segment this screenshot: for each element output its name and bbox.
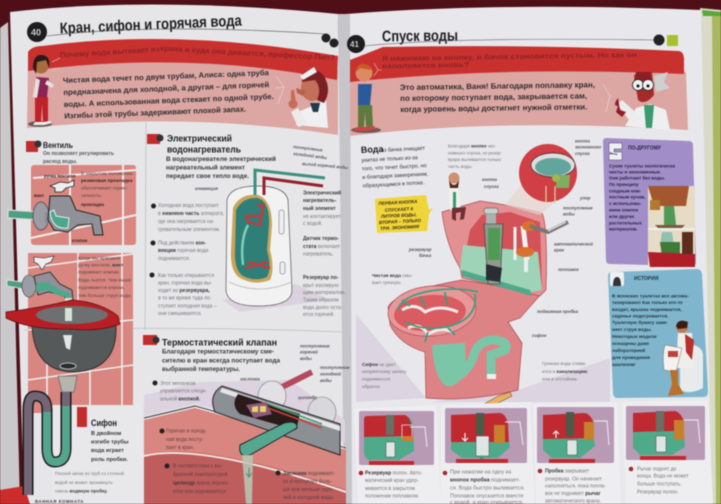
another way text: материалов. bbox=[609, 226, 638, 232]
heater labels: Резервуар по- bbox=[303, 275, 339, 281]
valve intro: расход воды. bbox=[43, 159, 78, 165]
heater steps: поднимается. bbox=[158, 256, 190, 262]
card text 3: вок не поднимет рычаг bbox=[545, 491, 601, 497]
thermostat steps: цилиндр крана опуска- bbox=[173, 480, 229, 486]
thermostat illustration bbox=[213, 372, 340, 504]
section: thermostatic valve bbox=[143, 335, 350, 504]
left page stack bbox=[0, 22, 20, 504]
toilet labels: Сифон не дает bbox=[362, 361, 397, 367]
toilet labels: неприятному запаху bbox=[362, 369, 407, 374]
another way text: сходным ком- bbox=[609, 188, 641, 194]
thermostat steps: Горячая и холод- bbox=[166, 428, 207, 434]
closed valve labels: клапан bbox=[72, 238, 88, 243]
heater labels: крыт изолирую- bbox=[303, 283, 340, 289]
siphon text: изгибе трубы bbox=[91, 438, 129, 446]
siphon text bbox=[55, 430, 129, 494]
speech marks right bbox=[374, 63, 612, 112]
toilet labels: кнопка bbox=[575, 138, 591, 144]
purple box bbox=[603, 138, 696, 266]
tank bbox=[442, 201, 546, 296]
header dots bbox=[322, 34, 338, 48]
closed valve labels: винт bbox=[34, 193, 45, 198]
blue box bbox=[608, 269, 708, 398]
history text: лабораторией bbox=[612, 347, 645, 353]
closed valve labels: обеспечивает герме- bbox=[81, 186, 128, 192]
card text 2: При нажатии на одну из bbox=[450, 470, 512, 476]
heater labels bbox=[195, 144, 349, 318]
card text 4: больше поступать. bbox=[637, 482, 682, 488]
open tap text: ручку вентиля, винт bbox=[78, 264, 124, 268]
toilet labels: резервуар bbox=[408, 247, 432, 252]
heater steps: ходит из резервуара, bbox=[158, 288, 210, 294]
toilet labels: ется в канализацию bbox=[542, 369, 587, 374]
heater labels: не контактирует bbox=[303, 214, 341, 220]
answer text right bbox=[400, 80, 595, 114]
yellow note: ПЕРВАЯ КНОПКА bbox=[378, 199, 417, 206]
step card 4 bbox=[622, 400, 713, 504]
heater labels: Датчик термо- bbox=[303, 236, 339, 242]
open tap text: поднимается клапан, bbox=[78, 286, 125, 291]
heater steps: они смешиваются. bbox=[158, 311, 202, 317]
left page header bbox=[27, 13, 338, 48]
thermostat intro: Благодаря термостатическому сме- bbox=[162, 350, 274, 356]
man on Japanese toilet bbox=[663, 321, 703, 396]
title right: Спуск воды bbox=[382, 27, 458, 45]
yellow note: СПУСКАЕТ 6 bbox=[385, 206, 414, 213]
toilet labels: упор bbox=[579, 196, 591, 200]
step card 1 bbox=[354, 405, 441, 504]
toilet labels: подниматься bbox=[362, 376, 391, 382]
heater labels: выход горячей воды bbox=[302, 161, 349, 170]
toilet intro text: того, что течет быстро, но bbox=[362, 163, 427, 172]
siphon text: В двойном bbox=[91, 430, 121, 437]
heater labels: конвекция bbox=[195, 186, 218, 191]
closed valve tiled panel bbox=[31, 165, 136, 245]
toilet labels: поплавок bbox=[558, 267, 579, 272]
toilet labels: экономного bbox=[575, 144, 601, 150]
right page header bbox=[347, 27, 678, 53]
right page bbox=[346, 7, 712, 504]
heater steps: Под действием кон- bbox=[158, 240, 206, 246]
red corner bbox=[0, 486, 30, 504]
toilet labels: поступление bbox=[563, 206, 593, 210]
closed tap bbox=[8, 180, 103, 235]
thermostat steps: ется или поднимается. bbox=[173, 489, 227, 495]
valve intro: Он позволяет регулировать bbox=[43, 151, 114, 157]
answer text right: когда уровень воды достигнет нужной отметки. bbox=[400, 102, 587, 114]
heater steps bbox=[150, 203, 224, 317]
character: professor Pip left bbox=[288, 67, 328, 128]
history text: Туалетную бумагу заме- bbox=[612, 319, 669, 325]
heater steps: Холодная вода поступает bbox=[158, 203, 220, 209]
toilet labels: вает грязную. bbox=[372, 280, 402, 285]
thermostat wall and floor bbox=[144, 380, 346, 504]
panel: another way bbox=[603, 138, 696, 267]
question text right: Я нажимаю на кнопку, и бачок становится пустым. Но как он bbox=[382, 50, 637, 63]
heater labels: холодной воды bbox=[292, 151, 327, 160]
open tap text: поднимает клапан. bbox=[78, 270, 120, 276]
icon: pipe bbox=[609, 143, 622, 160]
thermostat steps: альной кнопкой. bbox=[160, 396, 201, 402]
answer text: Чистая вода течет по двум трубам, Алиса: одна труба bbox=[63, 68, 270, 85]
heater heading: Электрический bbox=[167, 134, 232, 144]
heater intro: нагревательный элемент bbox=[166, 164, 245, 172]
heater labels: вода долго оста- bbox=[303, 305, 343, 311]
yellow note: ЛИТРОВ ВОДЫ, bbox=[380, 212, 417, 219]
another way text: постным кучам, bbox=[609, 194, 645, 200]
toilet intro text bbox=[361, 142, 429, 189]
card text 2: Поплавок опускается вместе bbox=[450, 494, 524, 500]
footer text: ВАННАЯ КОМНАТА bbox=[35, 499, 84, 504]
heater heading bbox=[167, 134, 241, 156]
thermostat steps: ся и поступает боль- bbox=[283, 479, 332, 485]
open tap text: Вода льется. Чем выше bbox=[78, 278, 132, 284]
history text: Некоторые модели bbox=[612, 334, 657, 339]
history heading: ИСТОРИЯ bbox=[634, 276, 659, 282]
toilet labels: сифон bbox=[532, 333, 547, 338]
heater steps: ступает холодная вода – bbox=[158, 304, 217, 310]
heater steps: где она нагревается на- bbox=[158, 219, 215, 225]
closed valve labels: тичность. bbox=[81, 194, 102, 199]
heater steps: гревательным элементом. bbox=[158, 227, 220, 233]
thermostat steps: бранной температурой bbox=[173, 471, 228, 478]
toilet labels: автоматический bbox=[554, 242, 593, 246]
card text 4: конца. Вода не может bbox=[637, 474, 689, 480]
thermostat steps: Этот механизм bbox=[160, 381, 196, 387]
toilet labels: кнопка bbox=[482, 177, 498, 182]
heater intro: передает свое тепло воде. bbox=[166, 174, 249, 180]
thermostat labels bbox=[240, 344, 350, 400]
toilet labels: подвижная пробка bbox=[537, 309, 579, 314]
thermostat tab bbox=[143, 335, 160, 345]
another way text: растительных bbox=[609, 220, 642, 226]
card text 1: положении поплавком. bbox=[365, 494, 419, 500]
another way heading: ПО-ДРУГОМУ bbox=[628, 146, 662, 152]
thermostat intro: сителю в кран всегда поступает вода bbox=[162, 358, 281, 364]
thermostat labels: холодной bbox=[319, 372, 341, 376]
siphon text: роль пробки. bbox=[91, 456, 128, 463]
toilet labels: Грязная вода слива- bbox=[542, 361, 587, 366]
economy button text bbox=[448, 144, 502, 169]
heater labels: поступление bbox=[293, 144, 323, 153]
header icons right bbox=[654, 34, 678, 46]
water stream bbox=[65, 298, 72, 320]
water jets bbox=[398, 289, 478, 342]
toilet labels: спуска bbox=[484, 184, 499, 189]
another way text: Сухие туалеты экологически bbox=[609, 164, 675, 168]
speech marks bbox=[52, 58, 284, 104]
tank diagram 4 bbox=[626, 406, 705, 460]
toilet intro text: образующимся в потоке. bbox=[363, 180, 425, 189]
heater labels: ется горячей. bbox=[303, 311, 335, 318]
tiled wall bbox=[28, 253, 133, 413]
valve intro bbox=[43, 151, 114, 165]
question text bbox=[60, 44, 336, 62]
card text 1: Резервуар полон. Авто- bbox=[365, 470, 423, 476]
thermostat steps: управляется специ- bbox=[160, 388, 207, 394]
thermostat intro: выбранной температуры. bbox=[162, 366, 240, 373]
header rule right bbox=[364, 39, 655, 46]
red question band bbox=[28, 39, 338, 80]
toilet labels bbox=[362, 138, 601, 389]
siphon text: вода играет bbox=[91, 448, 124, 454]
history text: оснащены даже bbox=[612, 341, 649, 346]
siphon text: водой не может проникнуть bbox=[55, 479, 113, 485]
yellow note bbox=[375, 195, 433, 233]
pink answer panel right bbox=[350, 70, 688, 136]
thermostat labels: воды bbox=[320, 378, 332, 383]
open tap text: тем больше струя воды. bbox=[78, 293, 132, 299]
step card 2 bbox=[441, 402, 535, 504]
another way text: с использова- bbox=[609, 201, 642, 206]
toilet intro text: и благодаря завихрениям, bbox=[362, 171, 429, 181]
answer text bbox=[63, 68, 274, 120]
left page bbox=[10, 4, 346, 504]
thermostat labels: поступление bbox=[300, 344, 330, 348]
open tap and sink bbox=[6, 253, 133, 413]
page number 41 bbox=[347, 35, 365, 53]
toilet labels: или в отстойник. bbox=[542, 376, 578, 382]
thermostat steps: Заслонка поднимает- bbox=[283, 471, 335, 477]
toilet intro text: из бачка очищает bbox=[381, 146, 426, 154]
question text right: наполняется вновь? bbox=[382, 60, 469, 70]
title left: Кран, сифон и горячая вода bbox=[59, 13, 242, 37]
thermostat steps bbox=[152, 380, 335, 501]
heater labels: нагреватель. bbox=[303, 252, 334, 258]
open tap bbox=[7, 256, 73, 300]
closed valve labels: резиновая прокладка bbox=[81, 179, 133, 184]
tank diagram 2 bbox=[445, 408, 527, 463]
another way text: или других bbox=[609, 214, 635, 219]
answer text right: по которому поступает вода, закрывается сам, bbox=[400, 91, 587, 103]
another way text: Они работают без воды. bbox=[609, 174, 665, 180]
card text 3: Пробка закрывает bbox=[545, 468, 590, 474]
tank diagram 1 bbox=[359, 411, 434, 465]
thermostat steps: ная вода посту- bbox=[166, 437, 203, 443]
heater labels: Электрический bbox=[303, 190, 341, 196]
card text 3: наполняться, пока попла- bbox=[545, 484, 606, 490]
right banner bbox=[350, 46, 688, 136]
character: Alice bbox=[28, 55, 54, 127]
card background bbox=[622, 400, 713, 504]
toilet labels: бачка bbox=[419, 253, 432, 258]
heater tab bbox=[147, 134, 164, 144]
button closeup bbox=[505, 144, 577, 215]
history text: входит, крышка поднимается, bbox=[612, 307, 682, 312]
red question band right bbox=[350, 46, 684, 82]
book spine shadow bbox=[338, 14, 352, 504]
heater labels: с водой. bbox=[303, 220, 322, 227]
panel: history bbox=[608, 269, 708, 398]
heater labels: Таким образом bbox=[303, 298, 339, 304]
history text: В японских туалетах все автома- bbox=[612, 294, 689, 298]
question text right bbox=[382, 50, 637, 70]
thermostat steps: пает в кран. bbox=[166, 445, 194, 451]
siphon water bbox=[432, 340, 506, 386]
card text 3 bbox=[538, 468, 606, 504]
thermostat steps: В соответствии с вы- bbox=[173, 464, 223, 470]
floor: purple shadow bbox=[356, 314, 610, 402]
closed valve labels bbox=[34, 171, 133, 243]
thermostat labels: поступление bbox=[320, 365, 350, 370]
character: Vanya bbox=[351, 64, 381, 133]
card text 1 bbox=[359, 470, 423, 500]
card text 3: резервуар. Он начинает bbox=[545, 476, 603, 482]
open tap text: Когда мы вращаем bbox=[78, 256, 120, 262]
another way text bbox=[609, 164, 675, 232]
toilet labels: спуска bbox=[575, 151, 590, 156]
card text 2 bbox=[443, 470, 525, 504]
bowl and base bbox=[388, 280, 542, 399]
economy button text: вуара выливается только bbox=[448, 157, 502, 162]
tank water bbox=[460, 245, 542, 292]
answer text: Изгибы этой трубы задерживают плохой запах. bbox=[64, 104, 246, 120]
automatic valve and float bbox=[515, 221, 568, 272]
thermostat intro bbox=[162, 350, 281, 373]
answer text: воды. А использованная вода стекает по одной трубе. bbox=[64, 92, 274, 109]
history text bbox=[612, 294, 689, 367]
thermostat labels: горячей bbox=[300, 350, 318, 354]
pink answer panel bbox=[27, 57, 338, 135]
hand pressing button bbox=[482, 392, 512, 414]
card text 1: живается в закрытом bbox=[365, 486, 416, 492]
column divider bbox=[24, 122, 342, 332]
heater illustration bbox=[222, 170, 330, 312]
toilet intro text: Вода bbox=[361, 144, 385, 155]
toilet labels: кран bbox=[554, 248, 564, 252]
toilet labels: Чистая вода смы- bbox=[372, 273, 413, 278]
economy button text: часть воды. bbox=[448, 164, 473, 169]
toilet labels: воды bbox=[563, 212, 575, 216]
character: professor Pip right bbox=[615, 72, 670, 130]
history text: няет струя воды. bbox=[612, 327, 652, 332]
answer text: предназначена для холодной, а другая – для горячей bbox=[63, 80, 270, 97]
tank diagram 3 bbox=[537, 407, 614, 463]
heater intro: В водонагревателе электрический bbox=[166, 156, 276, 163]
flush mechanism bbox=[484, 208, 503, 284]
page number 40 bbox=[27, 22, 47, 42]
card text 2: кнопок пробка поднимает- bbox=[450, 476, 521, 484]
toilet illustration bbox=[386, 144, 577, 399]
dry toilet illustration bbox=[648, 186, 695, 267]
toilet labels: обратно. bbox=[362, 384, 381, 389]
another way text: По принципу bbox=[609, 182, 639, 187]
heater labels: ный элемент bbox=[303, 205, 336, 212]
thermostat steps: чей и холодной воды. bbox=[283, 494, 334, 501]
header rule bbox=[47, 29, 325, 36]
page number 40: 40 bbox=[31, 28, 41, 38]
another way text: нием опилок bbox=[609, 208, 639, 212]
left banner bbox=[27, 39, 338, 135]
heater steps: Как только открывается bbox=[158, 273, 214, 279]
heater labels: щим материалом. bbox=[303, 290, 346, 296]
card background bbox=[354, 405, 441, 504]
another way text: чисты и экономичные. bbox=[609, 170, 661, 174]
section: valve bbox=[8, 140, 136, 245]
heater labels: стата включает bbox=[303, 244, 341, 250]
thermostat steps: ше или меньше горя- bbox=[283, 487, 334, 493]
bowl interior bbox=[393, 292, 467, 334]
card text 4: Резервуар полон. bbox=[637, 490, 679, 496]
section: water heater bbox=[147, 134, 349, 318]
sink bbox=[6, 300, 120, 392]
siphon heading: Сифон bbox=[91, 418, 117, 429]
bowl rim bbox=[386, 282, 478, 340]
yellow note: ТРИ. ЭКОНОМИЯ! bbox=[380, 224, 420, 231]
tank cutaway bbox=[462, 212, 542, 292]
thermostat labels: цилиндр bbox=[298, 395, 317, 400]
right page stack and green book edge bbox=[700, 8, 721, 504]
siphon text: сквозь водяную пробку. bbox=[55, 488, 107, 494]
heater steps: кран, горячая вода вы- bbox=[158, 280, 212, 286]
page number 41: 41 bbox=[350, 40, 359, 49]
yellow note: ВТОРАЯ – ТОЛЬКО bbox=[379, 218, 422, 225]
valve tab bbox=[26, 140, 42, 152]
section: siphon bbox=[0, 392, 142, 504]
closed valve labels: прокладка bbox=[81, 202, 104, 207]
history text: анализов! bbox=[612, 362, 636, 367]
history text: сиденье подогревается. bbox=[612, 314, 668, 318]
thermostat labels: заслонка bbox=[240, 376, 260, 382]
answer text right: Это автоматика, Ваня! Благодаря поплавку кран, bbox=[400, 80, 595, 92]
economy button text: номного спуска, из резер- bbox=[448, 150, 502, 156]
heater labels: нагреватель- bbox=[303, 198, 337, 204]
valve heading: Вентиль bbox=[43, 140, 73, 150]
card text 2: ся. Вода быстро выливается. bbox=[450, 486, 525, 492]
card text 4 bbox=[629, 466, 689, 496]
siphon text: Плохой запах из труб со сточной bbox=[55, 470, 124, 476]
bearded man on tank bbox=[448, 172, 466, 221]
heater steps: векции горячая вода bbox=[158, 248, 208, 254]
card text 4: Рычаг поднят до bbox=[637, 466, 677, 472]
step card 3 bbox=[533, 402, 621, 504]
closed valve labels: ручка вентиля bbox=[44, 174, 76, 178]
history text: для проведения bbox=[612, 355, 650, 360]
open tap text bbox=[78, 256, 132, 299]
question text: крана и куда она девается, профессор Пип? bbox=[160, 44, 336, 62]
card background bbox=[533, 402, 621, 504]
siphon pipe bbox=[28, 392, 66, 495]
thermostat labels: воды bbox=[300, 356, 312, 361]
thermostat heading: Термостатический клапан bbox=[162, 338, 277, 348]
card text 1: матический кран удер- bbox=[365, 477, 419, 484]
history text: тизировано! Как только кто-то bbox=[612, 300, 683, 305]
economy button text: Благодаря кнопке эко- bbox=[448, 144, 497, 148]
heater heading: водонагреватель bbox=[167, 144, 241, 156]
siphon tab bbox=[77, 407, 87, 427]
closed valve labels: В закрытом положении bbox=[81, 171, 133, 177]
white siphon panel bbox=[52, 405, 142, 504]
heater intro bbox=[166, 156, 276, 180]
question text: Почему вода вытекает из bbox=[60, 44, 160, 59]
heater steps: в то же время туда по- bbox=[158, 296, 212, 302]
card background bbox=[441, 402, 535, 504]
heater steps: в нижнюю часть аппарата, bbox=[158, 211, 224, 217]
icon: history bbox=[610, 272, 624, 286]
toilet intro text: унитаз не только из-за bbox=[361, 155, 418, 164]
